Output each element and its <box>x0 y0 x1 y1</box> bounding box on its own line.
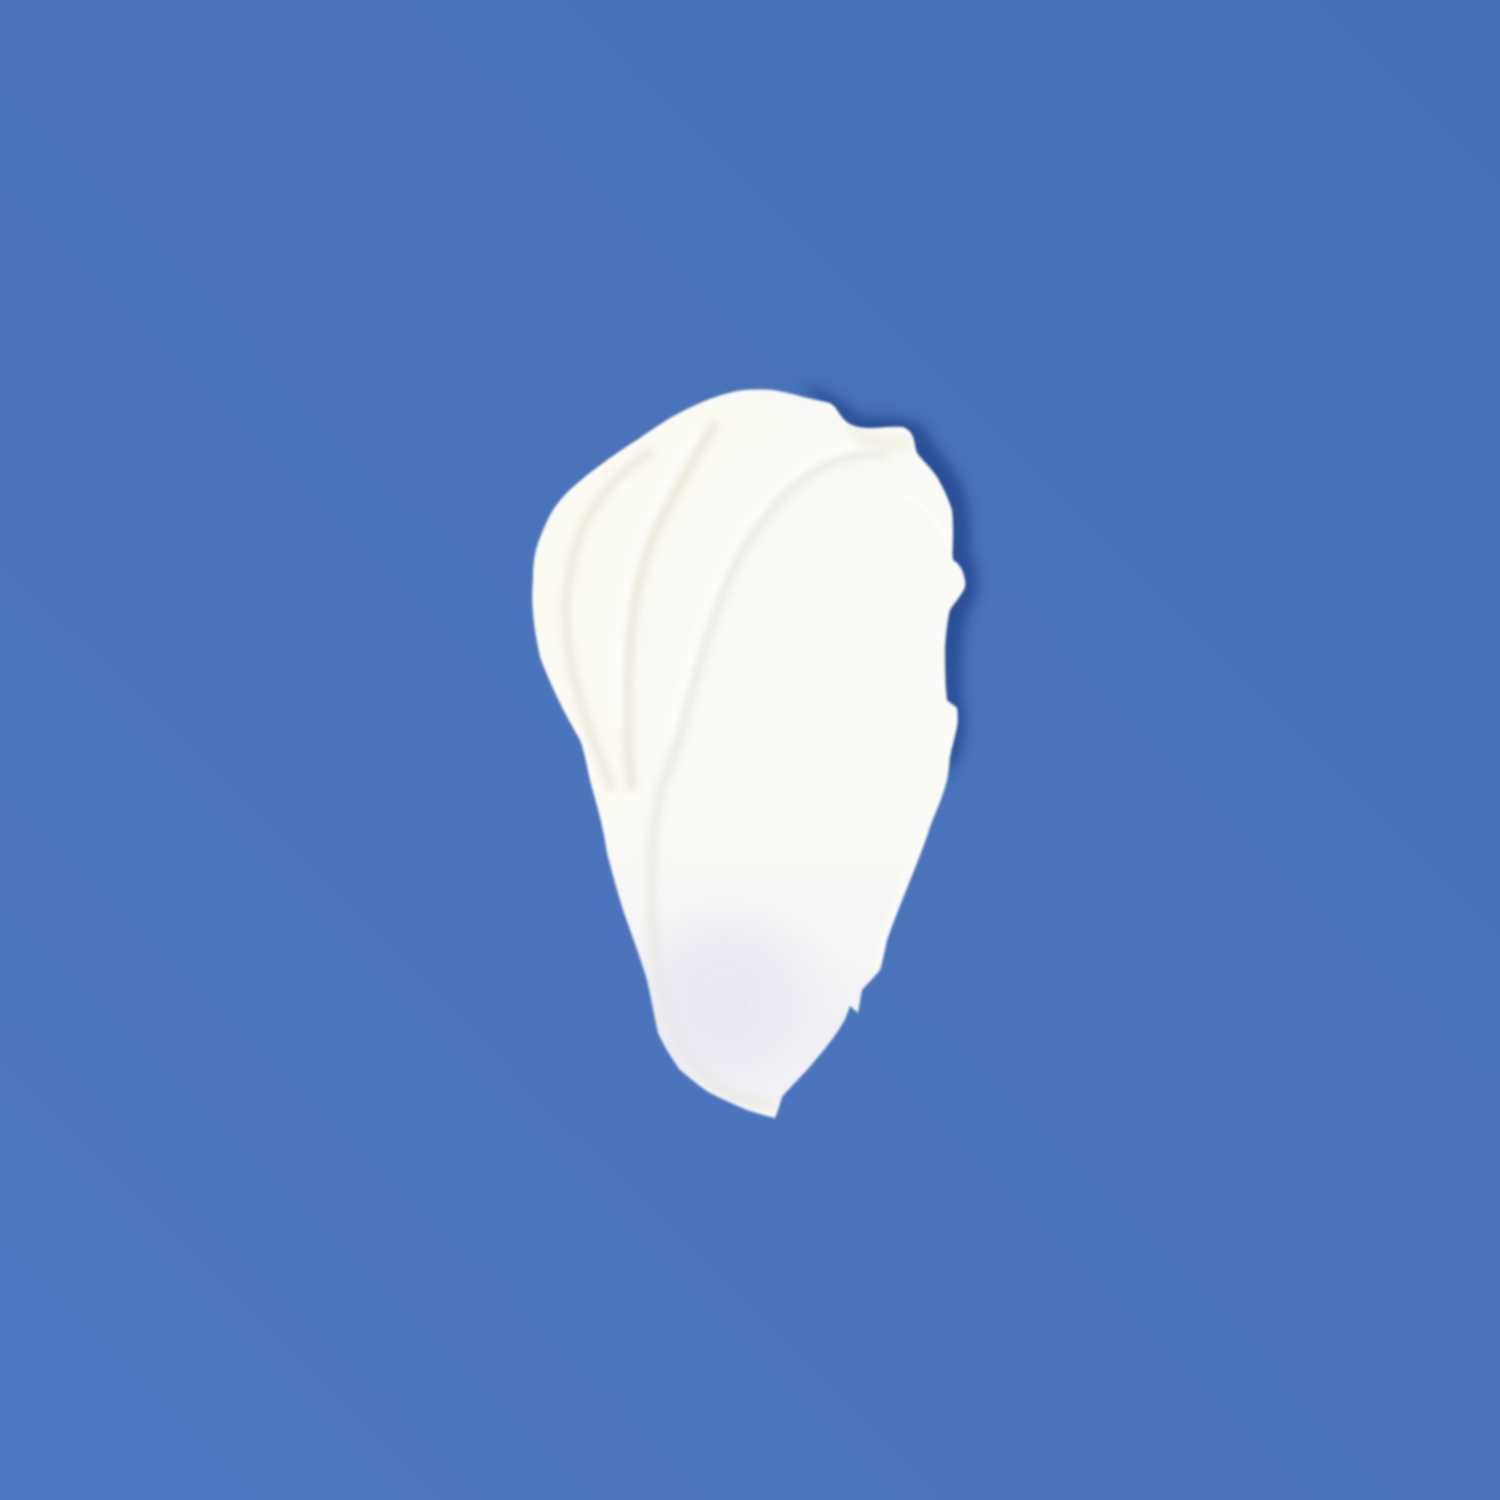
swatch: cream body <box>530 388 968 1120</box>
shading: third groove <box>651 454 887 1103</box>
shading: first groove <box>566 450 653 790</box>
highlight: third ridge <box>666 444 880 744</box>
swatch fill <box>530 388 968 1120</box>
photo: cream swatch on blue background <box>530 380 984 1120</box>
shadow: cream cast shadow, upper right <box>800 384 978 780</box>
shading: top crest fold <box>854 430 910 450</box>
highlight: glossy right rim <box>905 495 948 545</box>
shading: lower right rim <box>875 830 925 970</box>
shading: cool lower tint <box>670 932 784 1058</box>
shading: second groove <box>627 423 717 790</box>
highlight: second ridge <box>617 425 700 730</box>
highlight: warm left ridges <box>533 391 780 830</box>
